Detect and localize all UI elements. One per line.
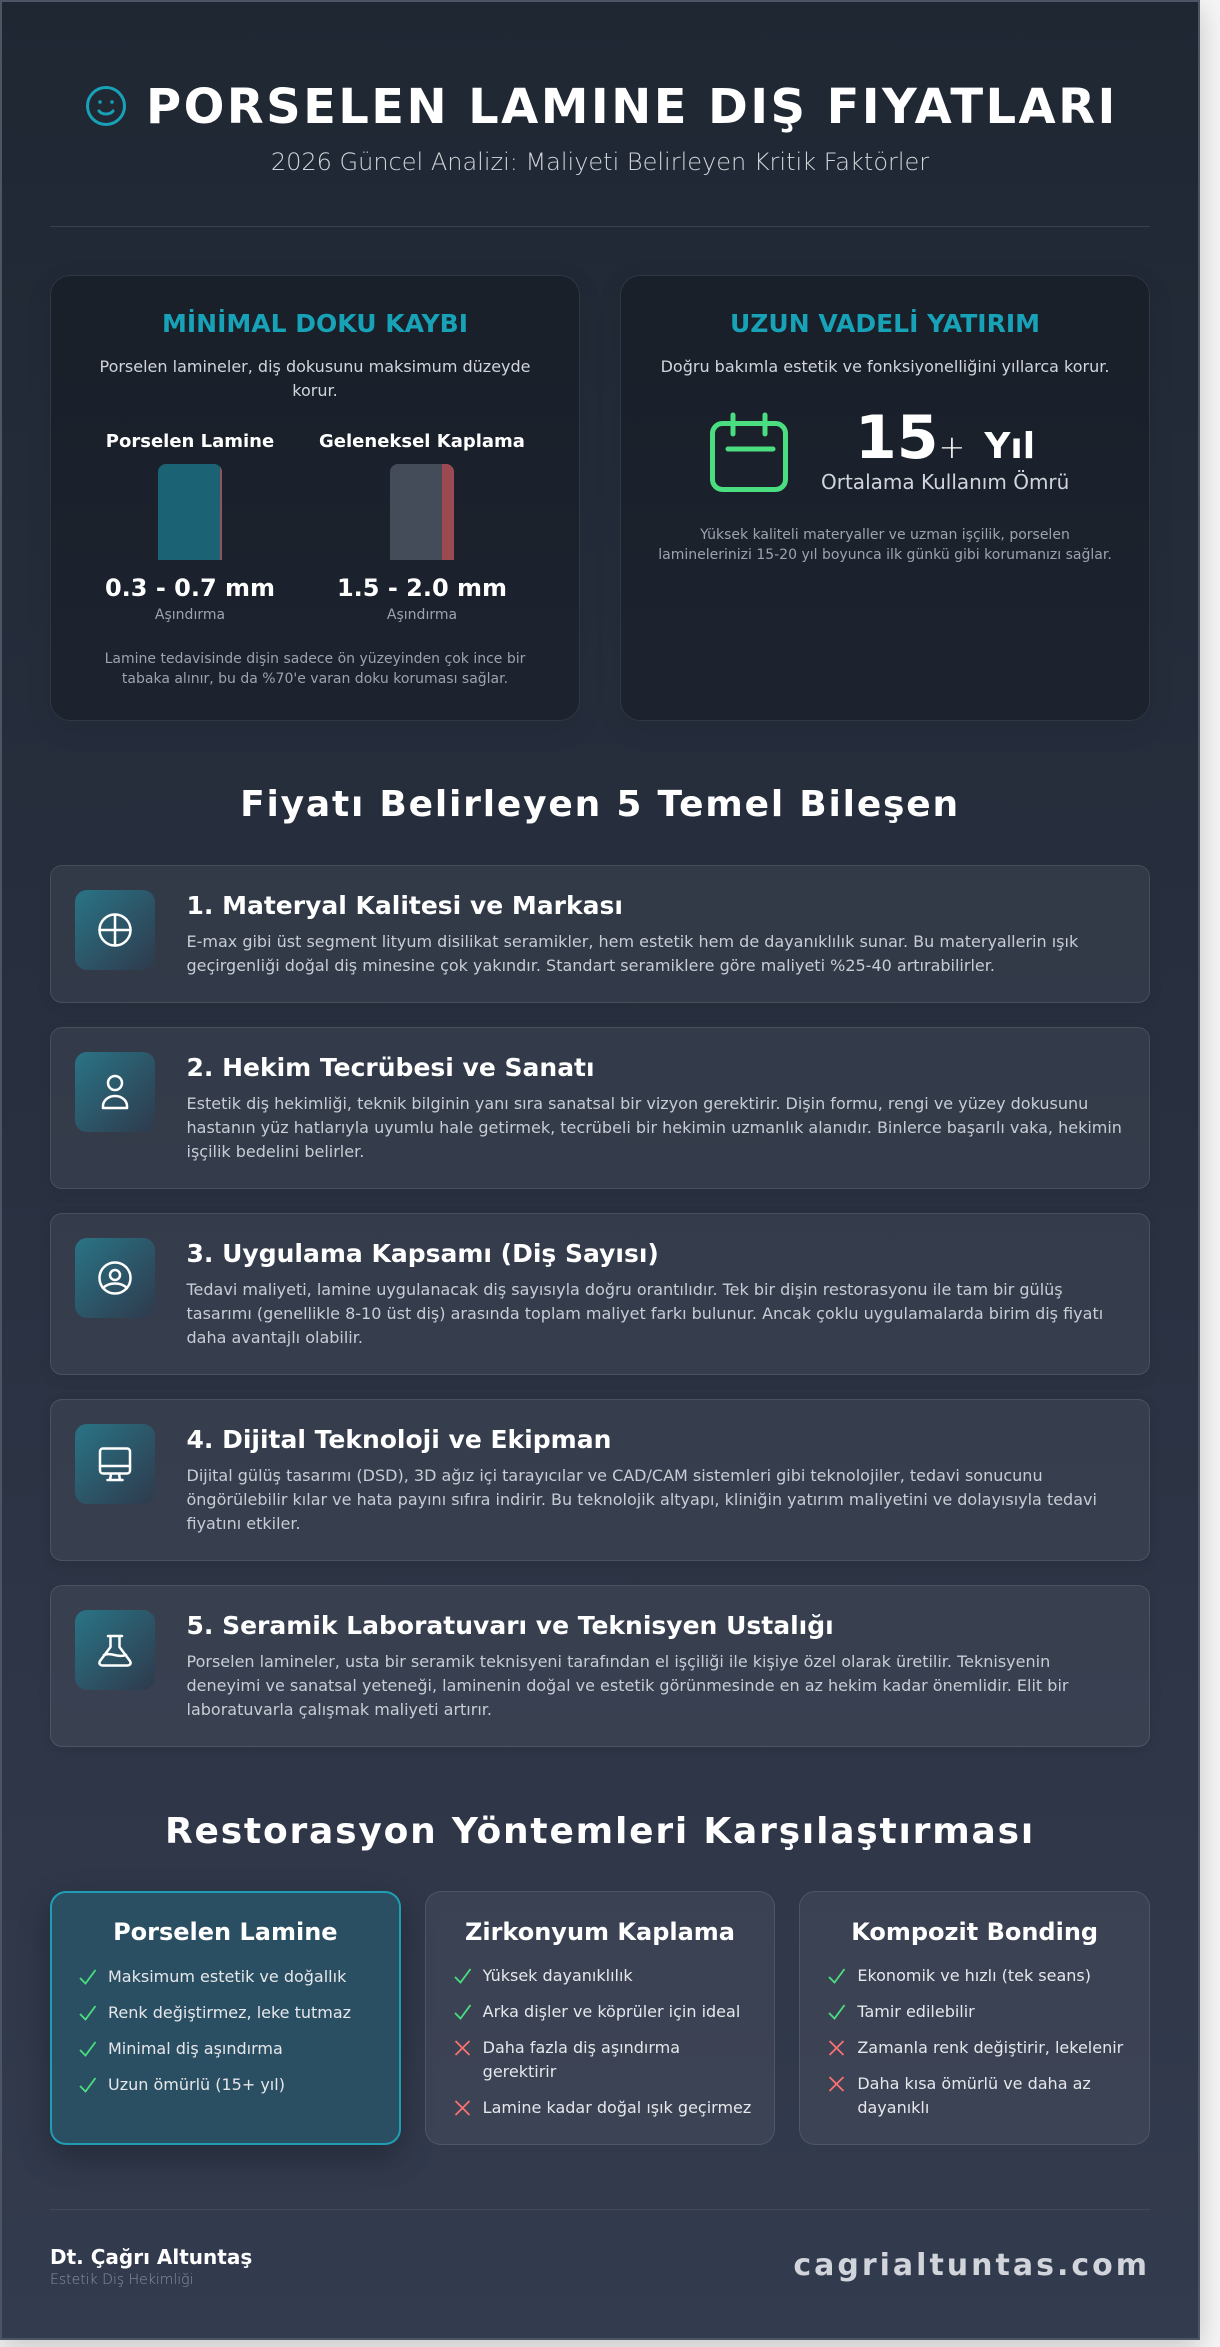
tooth bar — [158, 464, 222, 560]
label: Geleneksel Kaplama — [319, 431, 525, 452]
caption: Aşındırma — [155, 607, 225, 623]
icon: monitor — [75, 1424, 155, 1504]
comparison card: composite bonding — [799, 1891, 1150, 2145]
icon: flask — [75, 1610, 155, 1690]
panel note: tabaka alınır, bu da %70'e varan doku koruması sağlar. — [122, 671, 508, 687]
panel note — [658, 527, 1112, 563]
footer: doctor title: Estetik Diş Hekimliği — [50, 2272, 193, 2288]
icon: globe cross — [75, 890, 155, 970]
icon: user circle — [75, 1238, 155, 1318]
con item — [828, 2074, 1091, 2117]
card title: Zirkonyum Kaplama — [465, 1918, 735, 1946]
panel intro — [99, 357, 530, 400]
value: 1.5 - 2.0 mm — [337, 574, 507, 602]
factor text: öngörülebilir kılar ve hata payını sıfıra indirir. Bu teknolojik altyapı, kliniğin yatırım maliyetini ve dolayısıyla tedavi — [186, 1490, 1097, 1509]
stat caption: Ortalama Kullanım Ömrü — [821, 470, 1069, 494]
pro item: Renk değiştirmez, leke tutmaz — [108, 2003, 351, 2022]
pro item: Minimal diş aşındırma — [108, 2039, 283, 2058]
factor title: 3. Uygulama Kapsamı (Diş Sayısı) — [186, 1239, 659, 1268]
con item — [454, 2038, 680, 2081]
card title: Porselen Lamine — [113, 1918, 338, 1946]
factor text: laboratuvarla çalışmak maliyeti artırır. — [186, 1700, 492, 1719]
caption: Aşındırma — [387, 607, 457, 623]
con item: gerektirir — [483, 2062, 556, 2081]
value: 0.3 - 0.7 mm — [105, 574, 275, 602]
factor card 1 — [50, 865, 1150, 1003]
con item: Lamine kadar doğal ışık geçirmez — [483, 2098, 751, 2117]
comparison card: zirconia crown — [425, 1891, 775, 2145]
subtitle: 2026 Güncel Analizi: Maliyeti Belirleyen Kritik Faktörler — [271, 148, 929, 176]
con item: Daha kısa ömürlü ve daha az — [857, 2074, 1091, 2093]
factor text: hastanın yüz hatlarıyla uyumlu hale getirmek, tecrübeli bir hekimin uzmanlık alanıdır. Binlerce başarılı vaka, hekimin — [186, 1118, 1122, 1137]
factor text: işçilik bedelini belirler. — [186, 1142, 364, 1161]
factor text: tasarımı (genellikle 8-10 üst diş) arasında toplam maliyet farkı bulunur. Ancak çoklu uygulamalarda birim diş fiyatı — [186, 1304, 1103, 1323]
title: PORSELEN LAMINE DIŞ FIYATLARI — [146, 79, 1118, 135]
factor text — [186, 1652, 1068, 1719]
tooth bar — [390, 464, 454, 560]
factor text: E-max gibi üst segment lityum disilikat seramikler, hem estetik hem de dayanıklılık sunar. Bu materyallerin ışık — [186, 932, 1078, 951]
pro item: Yüksek dayanıklılık — [483, 1966, 633, 1985]
factor text: Tedavi maliyeti, lamine uygulanacak diş sayısıyla doğru orantılıdır. Tek bir dişin restorasyonu ile tam bir gülüş — [186, 1280, 1063, 1299]
con item: dayanıklı — [857, 2098, 929, 2117]
factor text: Porselen lamineler, usta bir seramik teknisyeni tarafından el işçiliği ile kişiye özel olarak üretilir. Teknisyenin — [186, 1652, 1050, 1671]
panel note: Lamine tedavisinde dişin sadece ön yüzeyinden çok ince bir — [105, 651, 525, 667]
factor text: fiyatını etkiler. — [186, 1514, 301, 1533]
factor text — [186, 1280, 1103, 1347]
column: porcelain laminate — [105, 431, 275, 623]
panel intro: Doğru bakımla estetik ve fonksiyonelliğini yıllarca korur. — [661, 357, 1109, 376]
factor text — [186, 1466, 1097, 1533]
factor text: geçirgenliği doğal diş minesine çok yakındır. Standart seramiklere göre maliyeti %25-40 artırabilirler. — [186, 956, 995, 975]
icon: calendar — [710, 412, 788, 492]
panel: long-term investment — [620, 275, 1150, 721]
pro item: Ekonomik ve hızlı (tek seans) — [857, 1966, 1091, 1985]
comparison card: porcelain laminate — [50, 1891, 401, 2145]
icon: person — [75, 1052, 155, 1132]
factor text: daha avantajlı olabilir. — [186, 1328, 363, 1347]
footer: doctor name: Dt. Çağrı Altuntaş — [50, 2245, 252, 2269]
panel note — [105, 651, 526, 687]
con item: Daha fazla diş aşındırma — [483, 2038, 680, 2057]
footer: website: cagrialtuntas.com — [793, 2248, 1150, 2283]
panel heading: UZUN VADELİ YATIRIM — [730, 309, 1040, 338]
factor card 5 — [50, 1585, 1150, 1747]
panel intro: Porselen lamineler, diş dokusunu maksimum düzeyde — [99, 357, 530, 376]
factor title: 2. Hekim Tecrübesi ve Sanatı — [186, 1053, 595, 1082]
factor title: 5. Seramik Laboratuvarı ve Teknisyen Ustalığı — [186, 1611, 834, 1640]
factor card 2 — [50, 1027, 1150, 1189]
factor card 4 — [50, 1399, 1150, 1561]
column: traditional crown — [319, 431, 525, 623]
factor title: 1. Materyal Kalitesi ve Markası — [186, 891, 623, 920]
header icon: smile — [86, 86, 126, 126]
stat: years: 15+ Yıl — [855, 403, 1035, 473]
card title: Kompozit Bonding — [851, 1918, 1098, 1946]
factor text: deneyimi ve sanatsal yeteneği, laminenin doğal ve estetik görünmesinde en az hekim kadar önemlidir. Elit bir — [186, 1676, 1068, 1695]
con item: Zamanla renk değiştirir, lekelenir — [857, 2038, 1123, 2057]
factor title: 4. Dijital Teknoloji ve Ekipman — [186, 1425, 611, 1454]
factor text — [186, 1094, 1122, 1161]
pro item: Uzun ömürlü (15+ yıl) — [108, 2075, 285, 2094]
label: Porselen Lamine — [106, 431, 274, 452]
pro item: Tamir edilebilir — [857, 2002, 975, 2021]
factor text — [186, 932, 1078, 975]
factor text: Dijital gülüş tasarımı (DSD), 3D ağız içi tarayıcılar ve CAD/CAM sistemleri gibi teknolojiler, tedavi sonucunu — [186, 1466, 1043, 1485]
factor card 3 — [50, 1213, 1150, 1375]
pro item: Arka dişler ve köprüler için ideal — [483, 2002, 740, 2021]
section heading: comparison: Restorasyon Yöntemleri Karşılaştırması — [165, 1811, 1035, 1852]
factor text: Estetik diş hekimliği, teknik bilginin yanı sıra sanatsal bir vizyon gerektirir. Dişin formu, rengi ve yüzey dokusunu — [186, 1094, 1088, 1113]
panel: minimal tissue loss — [50, 275, 580, 721]
panel note: Yüksek kaliteli materyaller ve uzman işçilik, porselen — [700, 527, 1070, 543]
pro item: Maksimum estetik ve doğallık — [108, 1967, 346, 1986]
section heading: five components: Fiyatı Belirleyen 5 Temel Bileşen — [240, 784, 960, 825]
panel intro: korur. — [292, 381, 338, 400]
panel heading: MİNİMAL DOKU KAYBI — [162, 309, 468, 338]
panel note: laminelerinizi 15-20 yıl boyunca ilk günkü gibi korumanızı sağlar. — [658, 547, 1112, 563]
